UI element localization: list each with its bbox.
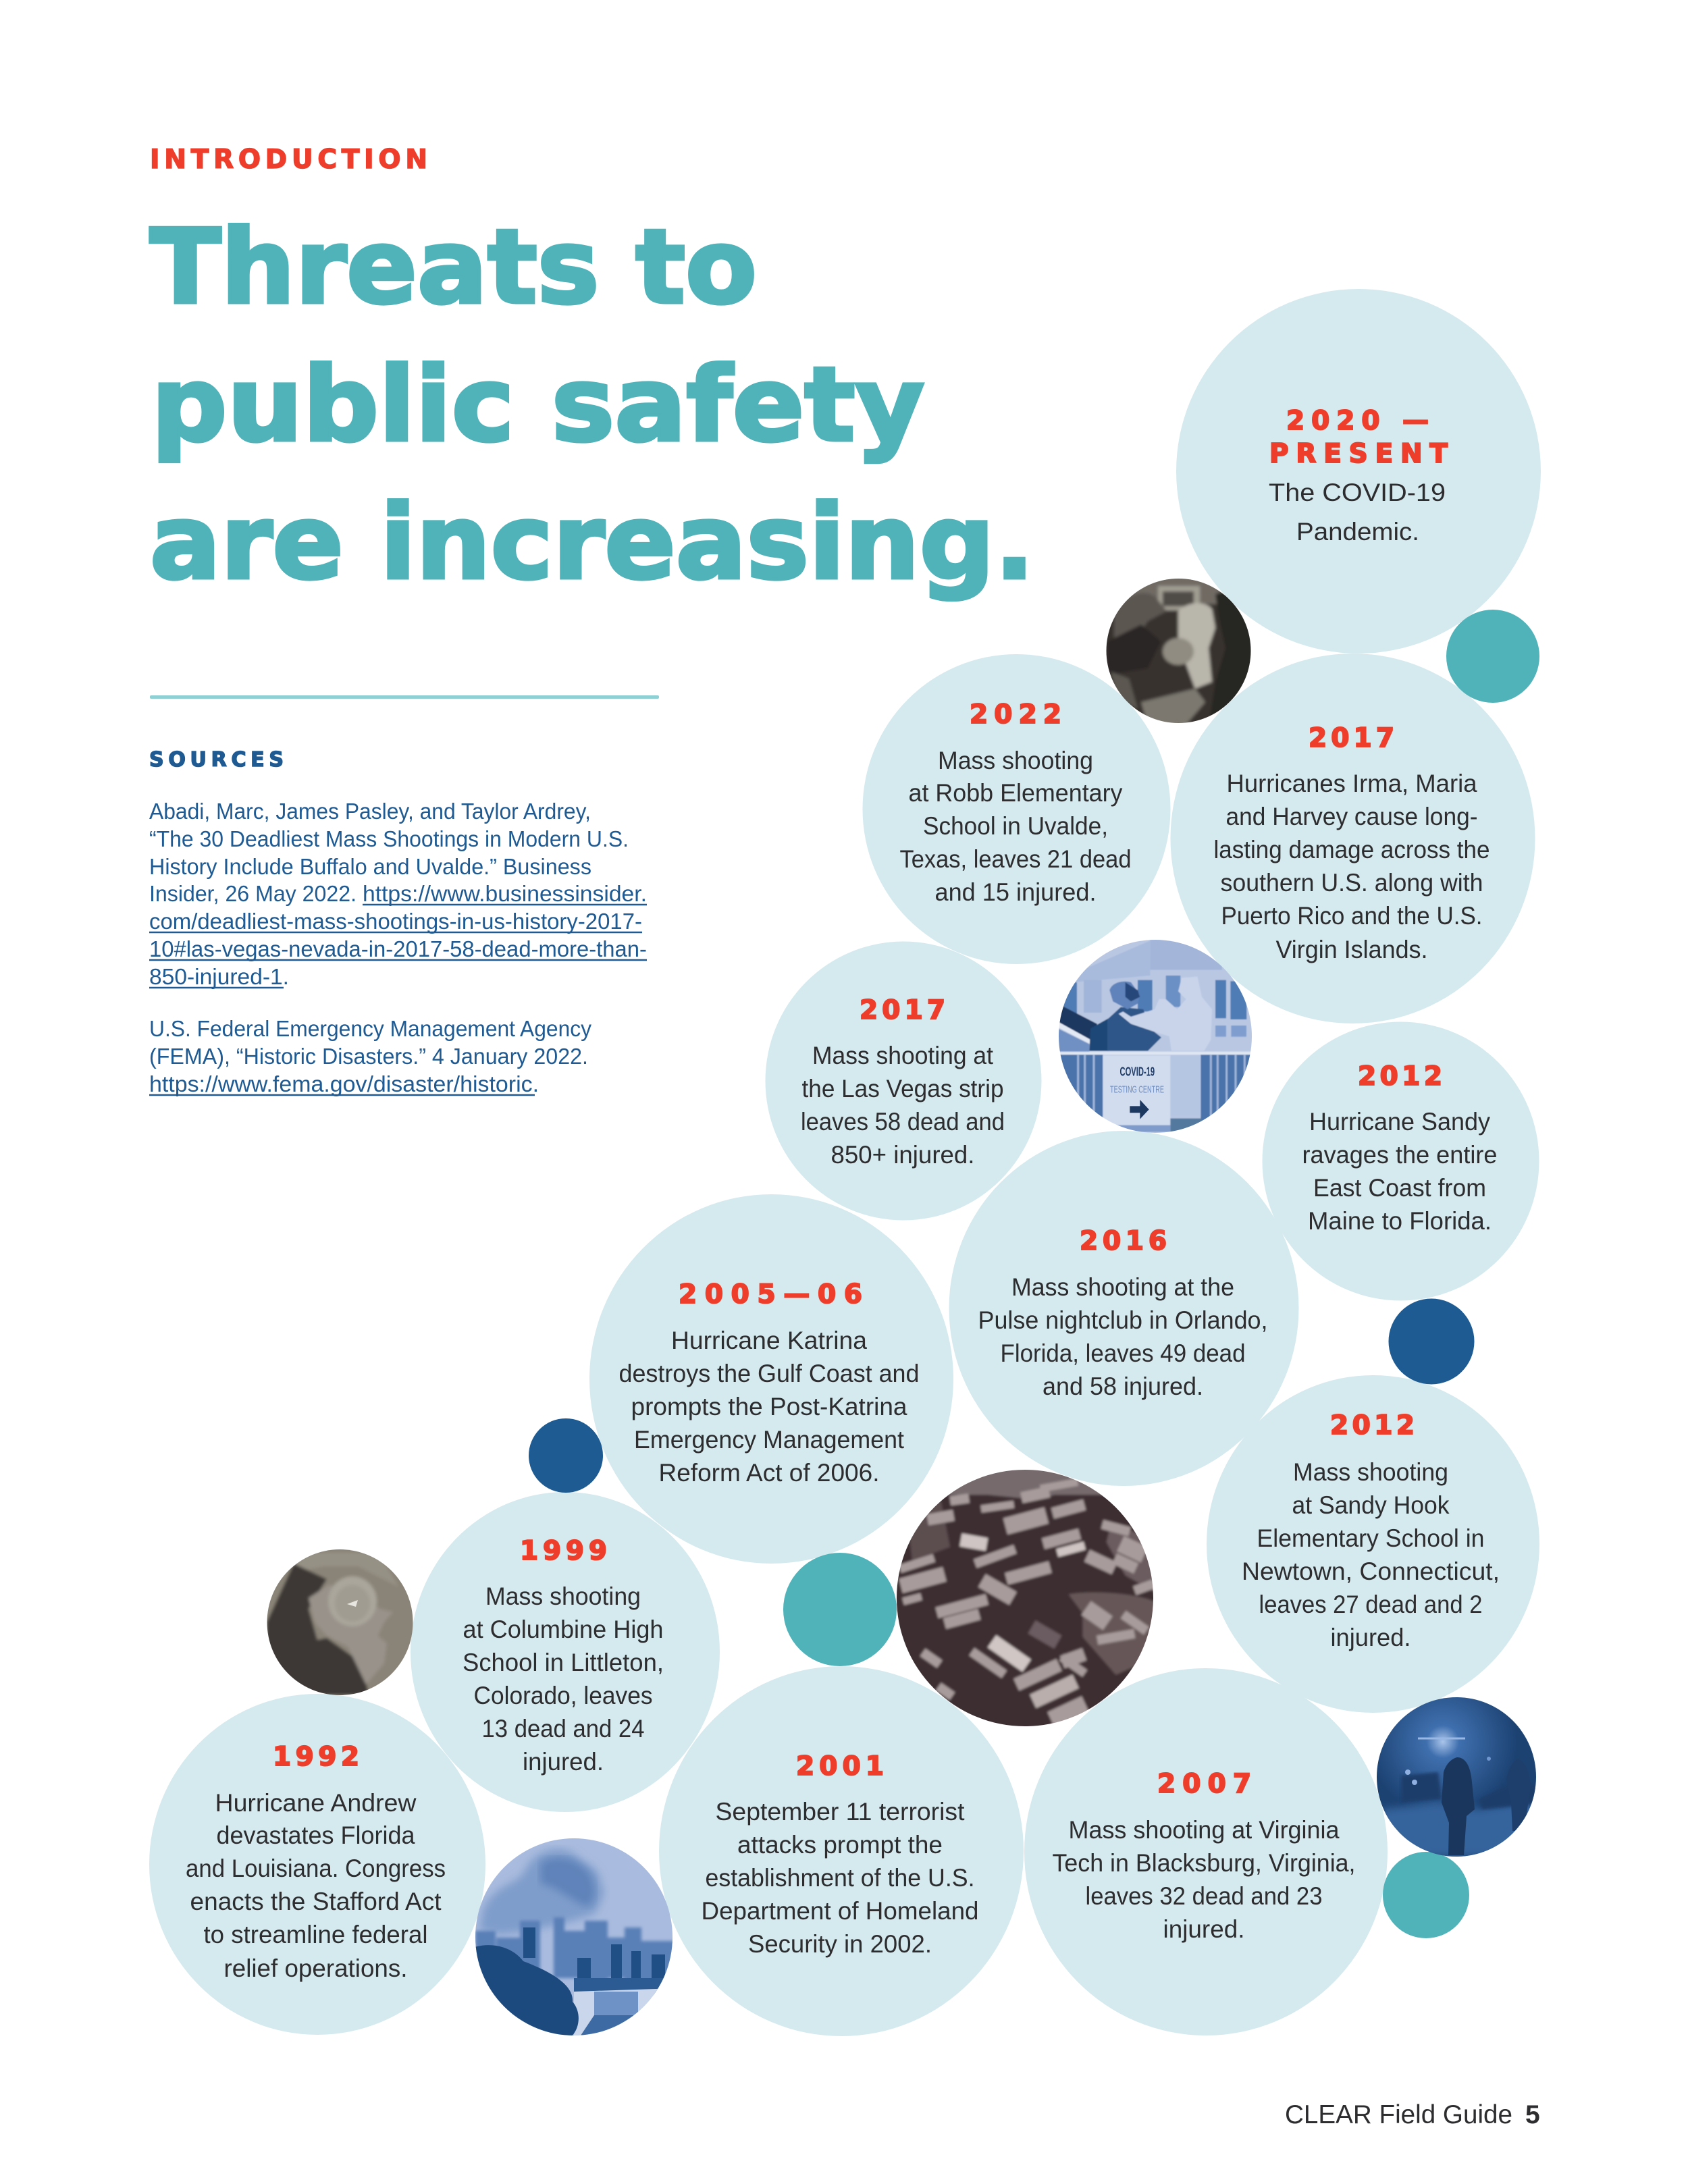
title: are increasing. bbox=[150, 483, 1034, 602]
description: at Columbine High bbox=[463, 1616, 663, 1643]
description: and 15 injured. bbox=[934, 878, 1097, 906]
year: 2005-06: 2005—06 bbox=[679, 1279, 862, 1310]
panel: 2017 hurricanes bbox=[1171, 654, 1535, 1023]
description: Colorado, leaves bbox=[474, 1682, 652, 1709]
description: leaves 58 dead and bbox=[801, 1108, 1005, 1136]
description bbox=[463, 1582, 664, 1776]
description: enacts the Stafford Act bbox=[190, 1888, 442, 1915]
description: injured. bbox=[523, 1748, 604, 1776]
description: Hurricanes Irma, Maria bbox=[1226, 770, 1477, 797]
description bbox=[978, 1273, 1268, 1400]
source citation: Business Insider: Abadi, Marc, James Pasley, and Taylor Ardrey, bbox=[149, 799, 591, 824]
description bbox=[1242, 1458, 1500, 1651]
description: Tech in Blacksburg, Virginia, bbox=[1052, 1849, 1356, 1877]
description: destroys the Gulf Coast and bbox=[618, 1360, 920, 1387]
description: Mass shooting at the bbox=[1011, 1273, 1234, 1301]
source citation: FEMA: https://www.fema.gov/disaster/historic. bbox=[149, 1071, 539, 1096]
panel: 2007 Virginia Tech bbox=[1024, 1668, 1388, 2035]
description: Reform Act of 2006. bbox=[659, 1459, 879, 1487]
description: Emergency Management bbox=[634, 1426, 905, 1454]
description: Newtown, Connecticut, bbox=[1242, 1557, 1500, 1585]
description: September 11 terrorist bbox=[716, 1798, 965, 1826]
panel: 2020 to present COVID-19 bbox=[1176, 289, 1541, 654]
description: Hurricane Katrina bbox=[671, 1327, 867, 1354]
description: Department of Homeland bbox=[701, 1897, 979, 1925]
description: Puerto Rico and the U.S. bbox=[1221, 902, 1483, 930]
year: 2017: 2017 bbox=[860, 995, 945, 1026]
description: 13 dead and 24 bbox=[482, 1715, 644, 1742]
description: East Coast from bbox=[1313, 1174, 1486, 1202]
year: 2017: 2017 bbox=[1309, 723, 1394, 753]
description: at Robb Elementary bbox=[909, 779, 1123, 807]
panel: 2001 September 11 bbox=[659, 1666, 1024, 2036]
description: The COVID-19 bbox=[1269, 479, 1446, 506]
description: attacks prompt the bbox=[737, 1831, 943, 1859]
source citation: Business Insider: “The 30 Deadliest Mass Shootings in Modern U.S. bbox=[149, 826, 629, 851]
description bbox=[1302, 1108, 1498, 1235]
photo: COVID-19 testing centre bbox=[1059, 940, 1252, 1133]
description: to streamline federal bbox=[204, 1921, 428, 1948]
description: devastates Florida bbox=[216, 1821, 415, 1849]
source citation: Business Insider: com/deadliest-mass-shootings-in-us-history-2017- bbox=[149, 909, 642, 934]
source citation: FEMA: U.S. Federal Emergency Management Agency bbox=[149, 1016, 591, 1041]
year: 2007: 2007 bbox=[1157, 1769, 1251, 1799]
year: 2020 to present: 2020 — bbox=[1286, 406, 1429, 436]
description: establishment of the U.S. bbox=[705, 1864, 975, 1892]
description: leaves 32 dead and 23 bbox=[1086, 1882, 1322, 1910]
photo: hands holding candle bbox=[267, 1549, 413, 1695]
description: School in Uvalde, bbox=[923, 812, 1108, 840]
accent dot: dark blue right bbox=[1388, 1299, 1475, 1384]
photo: COVID-19 testing centre: TESTING CENTRE bbox=[1110, 1084, 1164, 1095]
source citation: FEMA: (FEMA), “Historic Disasters.” 4 January 2022. bbox=[149, 1044, 588, 1069]
description: injured. bbox=[1330, 1624, 1411, 1651]
panel: 2005-06 Katrina bbox=[589, 1194, 953, 1564]
source citation: Business Insider: Insider, 26 May 2022. bbox=[149, 881, 357, 906]
description: prompts the Post-Katrina bbox=[631, 1393, 907, 1420]
accent dot: teal center bbox=[783, 1553, 897, 1666]
year: 2001: 2001 bbox=[796, 1751, 884, 1782]
panel: 1992 Hurricane Andrew bbox=[149, 1694, 485, 2035]
year: 2020 to present bbox=[1269, 406, 1448, 469]
description: Elementary School in bbox=[1257, 1524, 1484, 1552]
description bbox=[801, 1042, 1005, 1169]
title: public safety bbox=[151, 345, 924, 464]
photo: New York skyline with smoke bbox=[473, 1836, 675, 2039]
description: Maine to Florida. bbox=[1308, 1207, 1492, 1235]
description: ravages the entire bbox=[1302, 1141, 1498, 1169]
description bbox=[186, 1789, 446, 1982]
description: relief operations. bbox=[224, 1954, 408, 1982]
panel: 1999 Columbine bbox=[411, 1492, 720, 1812]
photo: hospital staff treating patient bbox=[1106, 579, 1250, 723]
description bbox=[618, 1327, 920, 1487]
photo: COVID-19 testing centre: COVID-19 bbox=[1119, 1064, 1155, 1078]
description bbox=[1214, 770, 1489, 963]
description: injured. bbox=[1163, 1915, 1245, 1943]
panel: 2022 Uvalde bbox=[863, 654, 1171, 964]
accent dot: dark blue left bbox=[529, 1418, 603, 1493]
accent dot: teal lower right bbox=[1383, 1852, 1469, 1938]
panel: 2012 Sandy Hook bbox=[1207, 1375, 1539, 1713]
sources block bbox=[149, 748, 647, 1096]
photo: flooded neighborhood aerial bbox=[897, 1470, 1153, 1726]
description bbox=[899, 747, 1132, 906]
description: at Sandy Hook bbox=[1292, 1491, 1450, 1519]
description: Mass shooting bbox=[485, 1582, 641, 1610]
footer: guide title and page number: CLEAR Field Guide bbox=[1285, 2100, 1512, 2129]
description: Mass shooting bbox=[938, 747, 1093, 774]
year: 2012: 2012 bbox=[1330, 1410, 1415, 1441]
description: Mass shooting bbox=[1293, 1458, 1448, 1486]
description: lasting damage across the bbox=[1214, 836, 1489, 863]
source citation: Business Insider: 850-injured-1. bbox=[149, 964, 289, 989]
description: 850+ injured. bbox=[830, 1141, 975, 1169]
section label: introduction: INTRODUCTION bbox=[150, 144, 427, 175]
year: 2020 to present: PRESENT bbox=[1269, 439, 1448, 469]
description bbox=[1052, 1816, 1356, 1943]
description: Hurricane Andrew bbox=[215, 1789, 417, 1817]
title bbox=[150, 207, 1034, 602]
year: 1999: 1999 bbox=[520, 1536, 607, 1566]
source citation: Business Insider: https://www.businessinsider. bbox=[363, 881, 647, 906]
description: Florida, leaves 49 dead bbox=[1001, 1339, 1245, 1367]
footer: guide title and page number: 5 bbox=[1525, 2100, 1540, 2129]
description bbox=[701, 1798, 979, 1958]
description: Virgin Islands. bbox=[1276, 936, 1427, 963]
description: southern U.S. along with bbox=[1221, 869, 1483, 897]
description: Pandemic. bbox=[1296, 518, 1419, 545]
description: Hurricane Sandy bbox=[1309, 1108, 1490, 1136]
description: Mass shooting at bbox=[812, 1042, 994, 1069]
title: Threats to bbox=[150, 207, 757, 327]
description: and Louisiana. Congress bbox=[186, 1855, 446, 1882]
year: 1992: 1992 bbox=[273, 1742, 359, 1772]
panel: 2012 Hurricane Sandy bbox=[1263, 1022, 1539, 1300]
source citation: FEMA bbox=[149, 1016, 591, 1096]
year: 2022: 2022 bbox=[970, 699, 1061, 730]
description: Mass shooting at Virginia bbox=[1068, 1816, 1340, 1844]
photo: night scene with figures bbox=[1374, 1695, 1539, 1860]
source citation: Business Insider bbox=[149, 799, 647, 989]
year: 2012: 2012 bbox=[1358, 1061, 1442, 1092]
description: leaves 27 dead and 2 bbox=[1259, 1591, 1483, 1618]
description: and 58 injured. bbox=[1043, 1373, 1203, 1400]
description: School in Littleton, bbox=[463, 1649, 664, 1676]
year: 2016: 2016 bbox=[1080, 1226, 1167, 1256]
description: the Las Vegas strip bbox=[802, 1075, 1003, 1102]
panel: 2017 Las Vegas bbox=[766, 941, 1041, 1221]
source citation: Business Insider: 10#las-vegas-nevada-in-2017-58-dead-more-than- bbox=[149, 936, 647, 961]
description: Pulse nightclub in Orlando, bbox=[978, 1306, 1268, 1334]
description bbox=[1269, 479, 1446, 545]
source citation: Business Insider: History Include Buffalo and Uvalde.” Business bbox=[149, 854, 591, 879]
sources heading: SOURCES bbox=[149, 748, 284, 772]
accent dot: teal top right bbox=[1446, 610, 1539, 703]
description: Texas, leaves 21 dead bbox=[899, 845, 1132, 873]
description: Security in 2002. bbox=[748, 1930, 932, 1958]
page canvas bbox=[149, 147, 1541, 2124]
description: and Harvey cause long- bbox=[1226, 803, 1477, 830]
panel: 2016 Pulse nightclub bbox=[949, 1131, 1299, 1486]
